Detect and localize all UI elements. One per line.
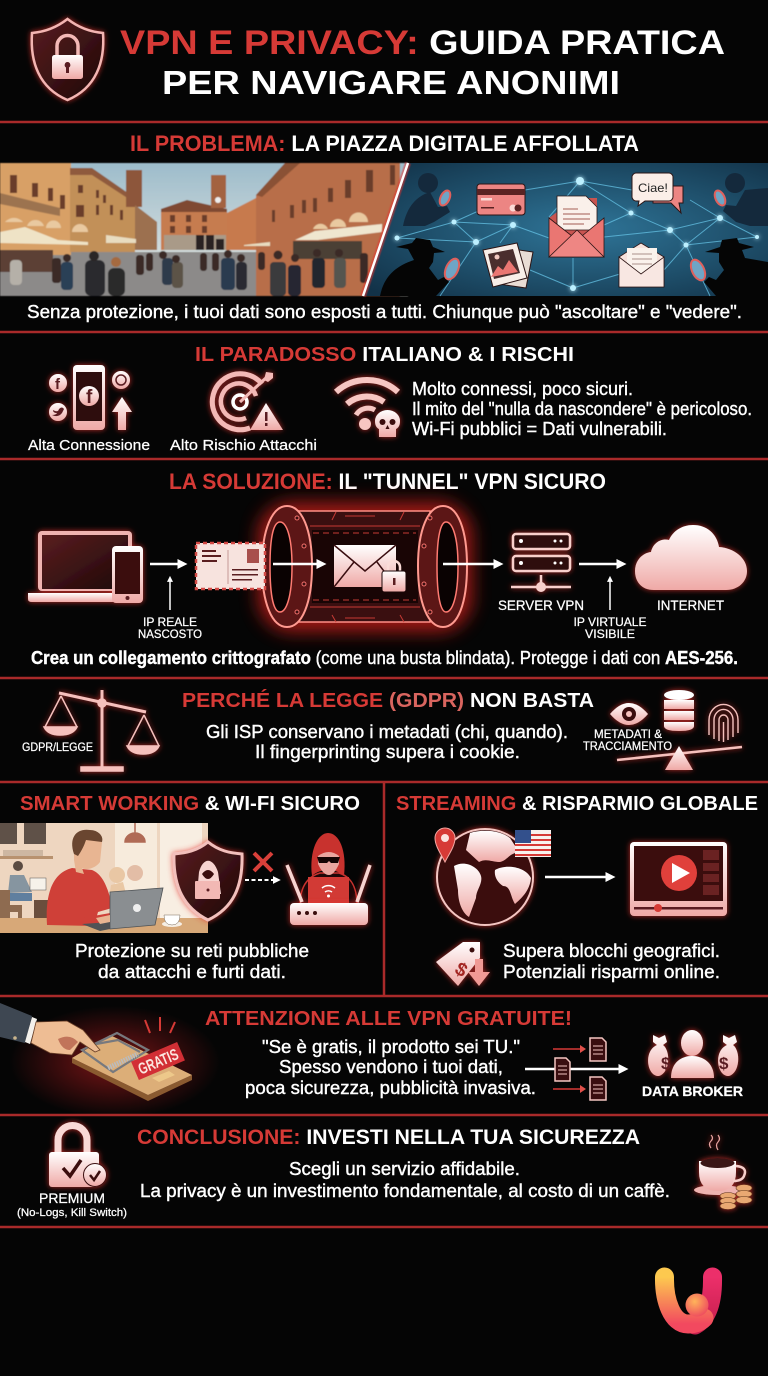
heading: conclusione: CONCLUSIONE: INVESTI NELLA TUA SICUREZZA xyxy=(137,1126,640,1149)
icon: phone and social networks: f xyxy=(86,387,93,408)
label: data broker: DATA BROKER xyxy=(642,1083,743,1099)
heading: attenzione: ATTENZIONE ALLE VPN GRATUITE! xyxy=(205,1008,572,1030)
heading: il problema: IL PROBLEMA: LA PIAZZA DIGITALE AFFOLLATA xyxy=(130,131,639,156)
header xyxy=(32,19,725,101)
label: server vpn: SERVER VPN xyxy=(498,597,584,613)
icon: vpn tunnel xyxy=(258,502,472,632)
title: VPN E PRIVACY: GUIDA PRATICA xyxy=(120,24,725,62)
label: premium: (No-Logs, Kill Switch) xyxy=(17,1207,127,1219)
title: PER NAVIGARE ANONIMI xyxy=(162,64,620,101)
label: premium xyxy=(17,1190,127,1219)
icon: hacker on router xyxy=(287,833,370,925)
text: free vpn warning: Spesso vendono i tuoi dati, xyxy=(279,1057,503,1077)
arrow: server to internet xyxy=(579,563,623,565)
text: streaming xyxy=(503,941,720,982)
panel: smart working xyxy=(0,793,370,982)
text: smart working xyxy=(75,941,309,982)
text: italian paradox: Wi-Fi pubblici = Dati vulnerabili. xyxy=(412,419,667,439)
heading: soluzione: LA SOLUZIONE: IL "TUNNEL" VPN SICURO xyxy=(169,469,606,494)
arrow: device to postcard xyxy=(150,563,184,565)
icon: credit card xyxy=(477,184,525,215)
label: internet: INTERNET xyxy=(657,597,724,613)
arrow: real ip xyxy=(169,578,171,610)
photo: crowded Italian piazza xyxy=(0,163,408,296)
icon: data broker with money bags: $ xyxy=(661,1054,671,1073)
text: free vpn warning: "Se è gratis, il prodotto sei TU." xyxy=(262,1037,520,1057)
heading: paradosso: IL PARADOSSO ITALIANO & I RISCHI xyxy=(195,344,574,366)
icon: eye, database, fingerprint xyxy=(610,690,738,742)
illustration: man working at a café xyxy=(0,823,208,933)
text: italian paradox: Molto connessi, poco sicuri. xyxy=(412,379,633,399)
icon: data flow to broker xyxy=(525,1038,625,1100)
text: smart working: da attacchi e furti dati. xyxy=(98,962,286,982)
panel: conclusione xyxy=(17,1126,752,1219)
text: streaming: Potenziali risparmi online. xyxy=(503,962,720,982)
label: ip reale nascosto: IP REALE xyxy=(143,615,197,629)
icon: open envelope with letter xyxy=(549,196,604,257)
title xyxy=(120,24,725,101)
icon: target with warning xyxy=(212,372,283,430)
label: premium: PREMIUM xyxy=(39,1190,105,1206)
text: conclusion: Scegli un servizio affidabile. xyxy=(289,1159,520,1179)
illustration: hand and mousetrap xyxy=(0,1003,220,1118)
label: ip reale nascosto: NASCOSTO xyxy=(138,627,202,641)
label: metadati e tracciamento: METADATI & xyxy=(594,727,662,741)
label: ip virtuale visibile: VISIBILE xyxy=(585,627,635,641)
label: metadati e tracciamento xyxy=(583,727,672,753)
icon: wifi with skull xyxy=(336,380,400,437)
label: ip virtuale visibile xyxy=(574,615,646,641)
divider slash xyxy=(363,163,408,296)
icon: phone and social networks: f xyxy=(55,376,61,393)
text: gdpr: Gli ISP conservano i metadati (chi, quando). xyxy=(206,722,568,742)
spies xyxy=(380,173,768,296)
icon: laptop and phone xyxy=(28,531,143,603)
icon: small envelope xyxy=(619,243,664,287)
text: free vpn warning: poca sicurezza, pubblicità invasiva. xyxy=(245,1078,536,1098)
icon: seesaw xyxy=(617,746,742,770)
label: gdpr/legge: GDPR/LEGGE xyxy=(22,740,93,754)
caption: problem: Senza protezione, i tuoi dati sono esposti a tutti. Chiunque può "ascoltare" e "vedere". xyxy=(27,302,742,322)
label: ip virtuale visibile: IP VIRTUALE xyxy=(574,615,646,629)
icon: phone and social networks xyxy=(49,365,132,430)
text: streaming: Supera blocchi geografici. xyxy=(503,941,720,961)
arrow: postcard into tunnel xyxy=(273,563,323,565)
text: gdpr: Il fingerprinting supera i cookie. xyxy=(255,742,520,762)
arrow: virtual ip xyxy=(609,578,611,610)
text: free vpn warning xyxy=(245,1037,536,1098)
arrow: globe to video xyxy=(545,876,612,878)
logo xyxy=(664,1277,713,1325)
panel: gdpr xyxy=(22,689,742,771)
label: ip reale nascosto xyxy=(138,615,202,641)
icon: chat bubbles xyxy=(632,173,683,213)
illustration: exposed data network xyxy=(363,163,768,296)
icon: premium padlock xyxy=(49,1126,106,1187)
panel: il problema xyxy=(0,131,768,322)
label: alto rischio attacchi: Alto Rischio Attacchi xyxy=(170,437,317,454)
arrow: tunnel to server xyxy=(443,563,500,565)
icon: vpn server xyxy=(511,534,571,592)
label: alta connessione: Alta Connessione xyxy=(28,437,150,454)
icon: locked envelope xyxy=(334,545,406,592)
text: italian paradox: Il mito del "nulla da nascondere" è pericoloso. xyxy=(412,399,752,419)
icon: blocked x mark xyxy=(254,853,272,871)
icon: globe with pin and flag xyxy=(435,828,551,925)
icon: photos xyxy=(483,243,533,288)
caption: solution: Crea un collegamento crittografato (come una busta blindata). Protegge i dati con AES-256. xyxy=(31,648,738,668)
icon: price tag with down arrow: $ xyxy=(451,958,471,982)
icon: coffee and coins xyxy=(694,1135,752,1210)
text: conclusion xyxy=(140,1159,670,1201)
icon: shield with hooded figure xyxy=(174,842,242,920)
panel: streaming xyxy=(396,793,758,986)
illustration: hand and mousetrap: GRATIS xyxy=(136,1046,181,1078)
text: gdpr xyxy=(206,722,568,762)
icon: internet cloud xyxy=(635,525,747,590)
icon: data broker with money bags xyxy=(648,1030,738,1078)
heading: smart working: SMART WORKING & WI-FI SICURO xyxy=(20,793,360,815)
text: conclusion: La privacy è un investimento fondamentale, al costo di un caffè. xyxy=(140,1181,670,1201)
panel: il paradosso italiano xyxy=(28,344,752,454)
heading: gdpr: PERCHÉ LA LEGGE (GDPR) NON BASTA xyxy=(182,689,594,712)
icon: postcard xyxy=(196,543,265,589)
panel: vpn gratuite xyxy=(0,1003,743,1118)
panel: la soluzione xyxy=(28,469,747,668)
heading: streaming: STREAMING & RISPARMIO GLOBALE xyxy=(396,793,758,815)
text: italian paradox xyxy=(412,379,752,439)
icon: video player xyxy=(630,842,727,916)
label: metadati e tracciamento: TRACCIAMENTO xyxy=(583,739,672,753)
text: smart working: Protezione su reti pubbliche xyxy=(75,941,309,961)
icon: price tag with down arrow xyxy=(436,942,490,986)
icon: data broker with money bags: $ xyxy=(719,1054,729,1073)
arrow: blocked connection xyxy=(245,879,278,881)
icon: chat bubbles: Ciae! xyxy=(638,181,668,195)
icon: shield with padlock xyxy=(32,19,103,100)
icon: unbalanced scale xyxy=(44,690,159,771)
